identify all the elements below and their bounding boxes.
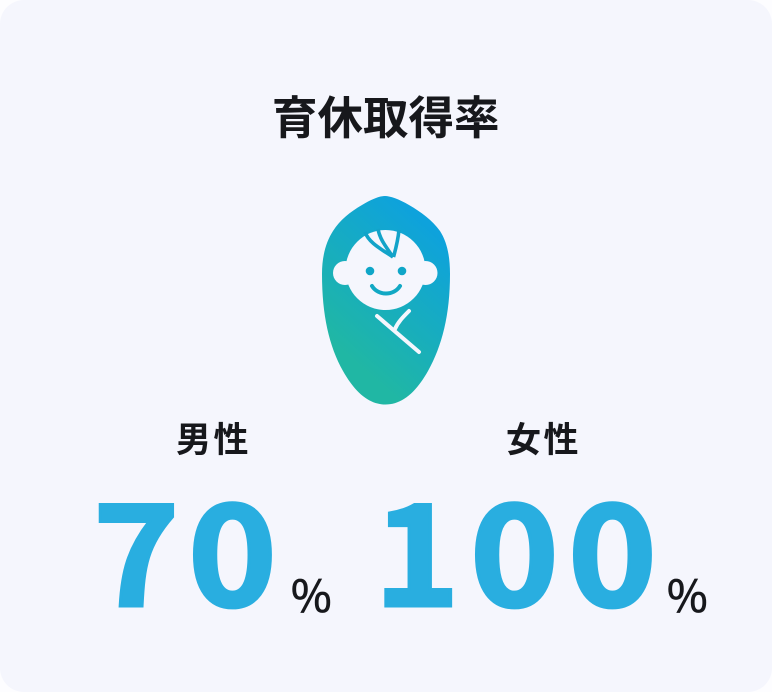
title: 育休取得率: [272, 82, 500, 148]
stat: male 70 percent: [93, 448, 332, 646]
baby face: [333, 229, 438, 310]
stat: female 100 percent: [374, 448, 708, 646]
label: female: 女性: [506, 412, 581, 463]
swaddle fold lines: [377, 311, 419, 352]
number 70: digit 0: 0: [188, 448, 277, 646]
percent sign: %: [291, 561, 332, 625]
number 70: digit 7: 7: [93, 448, 180, 646]
number 100: digit 0: 0: [470, 448, 559, 646]
label: male: 男性: [176, 412, 251, 463]
number 100: digit 1: 1: [374, 448, 459, 646]
icon: swaddled baby: [322, 196, 450, 404]
percent sign: %: [667, 561, 708, 625]
number 100: digit 0: 0: [568, 448, 657, 646]
